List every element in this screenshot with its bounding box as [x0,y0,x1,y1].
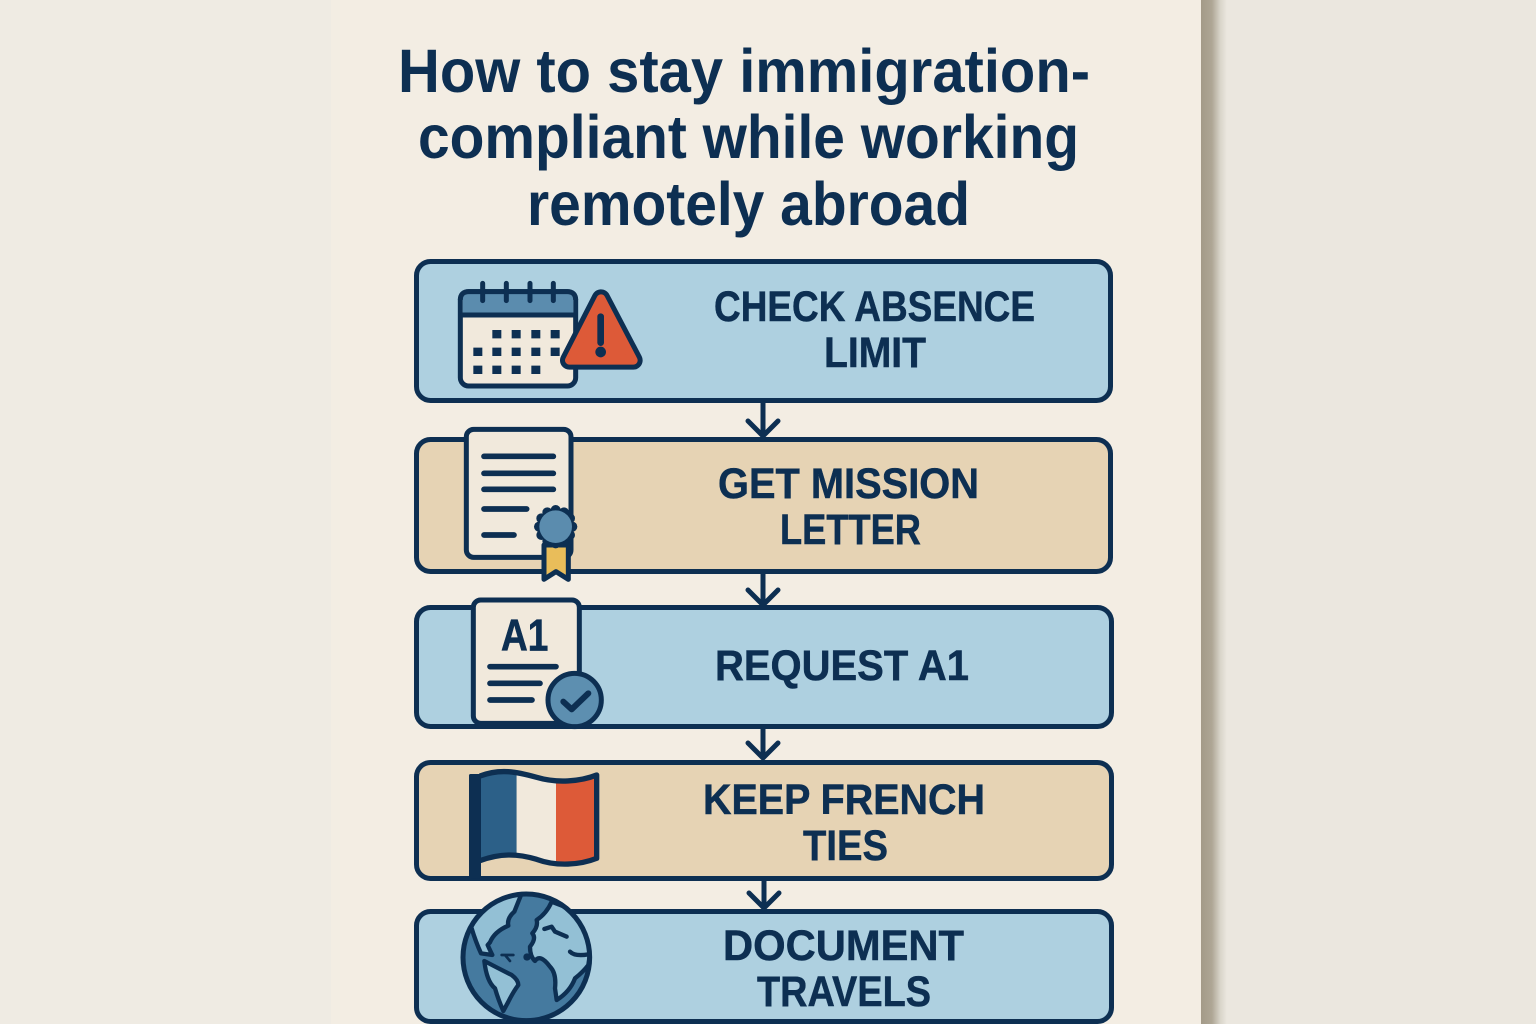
icon: A1 document with check: A1 [501,612,548,661]
step 5: document travels [416,890,1112,1022]
step 3: request A1 [416,600,1112,727]
paper panel [331,0,1201,1024]
icon: A1 document with check [473,600,601,727]
step 4 label: KEEP FRENCH [703,776,985,824]
step 5 label [723,922,964,1016]
step 4 label [703,776,985,870]
step 5 box [416,912,1112,1022]
step 2 label [718,460,979,554]
arrow: step 3 to 4 [748,728,778,758]
paper shadow [1201,0,1227,1024]
step 3 label: REQUEST A1 [715,642,969,690]
step 4: keep French ties [416,762,1112,878]
right wall area [1227,0,1536,1024]
icon: calendar with warning [460,283,633,386]
step 1 label [714,283,1035,377]
arrow: step 1 to 2 [748,402,778,436]
step 2 box [416,440,1110,572]
arrow: step 2 to 3 [748,573,778,605]
icon: globe [463,890,595,1021]
step 5 label: TRAVELS [757,968,931,1016]
step 2 label: GET MISSION [718,460,979,508]
step 3 box [416,608,1112,726]
icon: certified letter [466,429,577,579]
step 2: get mission letter [416,429,1110,579]
step 5 label: DOCUMENT [723,922,964,970]
title: How to stay immigration- [398,37,1090,105]
arrow: step 4 to 5 [749,880,779,908]
step 1 label: CHECK ABSENCE [714,283,1035,331]
step 2 label: LETTER [780,506,921,554]
icon: French flag [469,763,599,878]
step 4 box [416,762,1112,878]
step 4 label: TIES [803,822,888,870]
step 1 box [416,262,1110,400]
step 1: check absence limit [416,262,1110,400]
step 1 label: LIMIT [824,329,926,377]
title: compliant while working [418,103,1079,171]
infographic [402,0,1226,1024]
title [398,37,1090,238]
title: remotely abroad [527,170,970,238]
